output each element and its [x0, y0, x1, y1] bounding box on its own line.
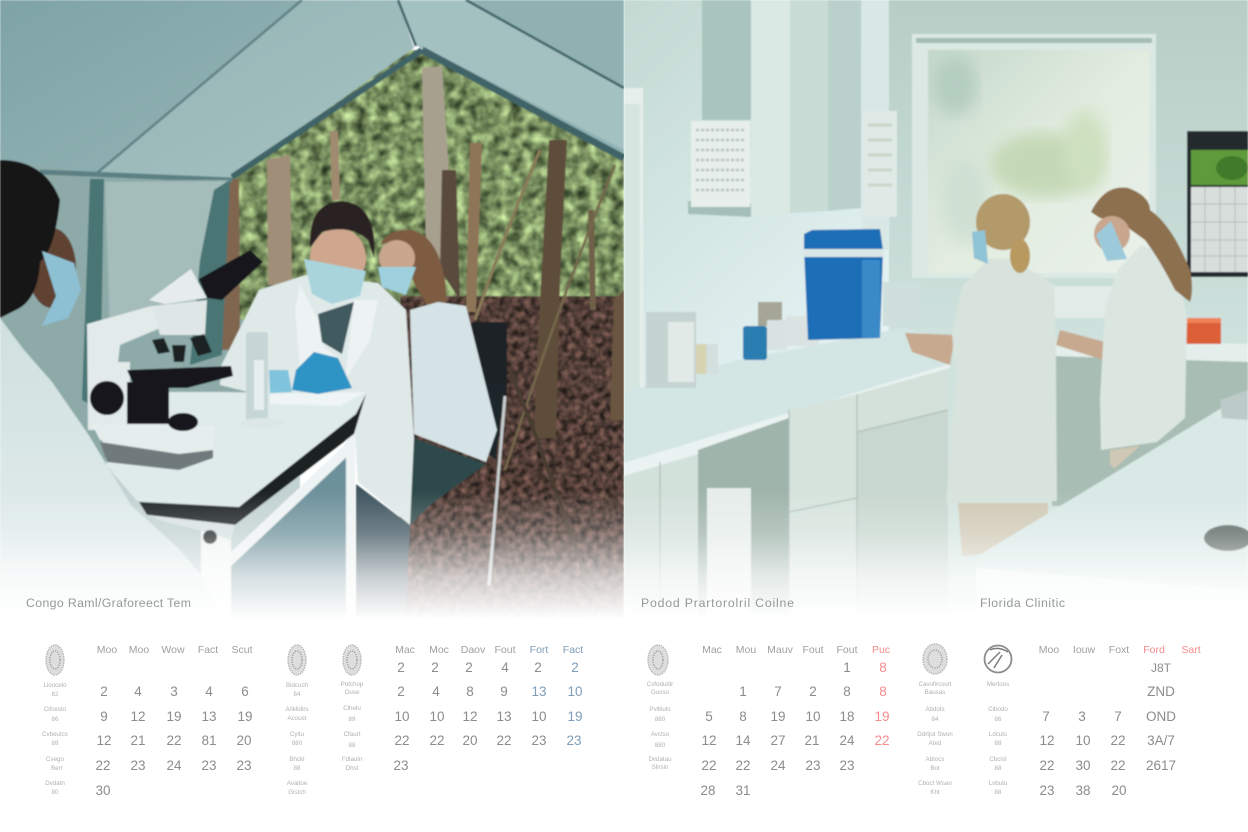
day numbers: 24 — [770, 758, 786, 773]
counter supplies — [646, 302, 819, 388]
side labels column 4 — [647, 681, 673, 771]
side labels column 6 — [987, 681, 1009, 796]
side labels column 5: Ddrtjut Swon — [917, 731, 953, 738]
day numbers: 7 — [774, 684, 782, 699]
day numbers: 4 — [134, 684, 142, 699]
day numbers: 13 — [496, 709, 512, 724]
day numbers: 2 — [100, 684, 108, 699]
day numbers: 13 — [531, 684, 547, 699]
weekday headers: Scut — [231, 644, 253, 656]
bottom white fade — [0, 490, 1248, 630]
weekday headers: Foxt — [1109, 644, 1129, 656]
day numbers: 23 — [1039, 783, 1055, 798]
day numbers: 5 — [705, 709, 713, 724]
wall cabinets — [688, 0, 861, 217]
staff member left: dress — [946, 259, 1057, 503]
weekday headers: Moo — [129, 644, 149, 656]
icon: face — [343, 645, 361, 675]
day numbers: 19 — [770, 709, 786, 724]
photo caption: podcast: Podod Prartorolril Coilne — [641, 596, 794, 610]
chair — [470, 322, 507, 585]
day numbers: 23 — [805, 758, 821, 773]
side labels column 2: A/iklidirs — [285, 706, 309, 713]
day numbers: J8T — [1151, 661, 1172, 675]
day numbers: 19 — [567, 709, 583, 724]
side labels column 5 — [917, 681, 953, 796]
side labels column 1: Berr — [51, 765, 63, 772]
side labels column 4: Slirsin — [652, 764, 669, 771]
day numbers: 2617 — [1146, 758, 1176, 773]
day numbers: 22 — [735, 758, 751, 773]
side labels column 5: Bot — [930, 765, 940, 772]
side labels column 6: Lvbutu — [989, 780, 1008, 787]
side labels column 2: Gistch — [288, 789, 306, 796]
lower cabinets — [658, 368, 950, 598]
day numbers: 38 — [1075, 783, 1091, 798]
day numbers: 3 — [170, 684, 178, 699]
door frame — [624, 88, 643, 392]
day numbers: 22 — [429, 733, 445, 748]
day numbers: 23 — [566, 733, 582, 748]
icon: face — [46, 645, 64, 675]
side labels column 1 — [42, 682, 68, 796]
wall notice left — [691, 121, 750, 207]
window — [912, 34, 1156, 278]
day numbers: 23 — [393, 758, 409, 773]
scientist back: hair and coat — [377, 229, 498, 524]
day numbers: 23 — [201, 758, 217, 773]
day numbers: 6 — [241, 684, 249, 699]
back wall below counter — [1052, 356, 1248, 506]
day numbers: 2 — [809, 684, 817, 699]
side labels column 6: 88 — [995, 740, 1002, 747]
side labels column 2: Bidcuch — [286, 682, 309, 689]
clinic wall — [648, 0, 1248, 588]
side labels column 6: Cibodo — [988, 706, 1008, 713]
side labels column 6: Cbclst — [989, 756, 1007, 763]
day numbers: 4 — [501, 660, 509, 675]
microscope — [87, 250, 263, 470]
side labels column 1: Lioncelo — [43, 682, 67, 689]
day numbers: 20 — [236, 733, 252, 748]
day numbers: 8 — [739, 709, 747, 724]
weekday headers: Mou — [736, 644, 756, 656]
weekday headers: Fout — [802, 644, 824, 656]
side labels column 5: Cavofircsurt — [918, 681, 952, 688]
weekday headers: Mauv — [767, 644, 794, 656]
orange kit box — [1186, 317, 1222, 345]
day numbers: 22 — [496, 733, 512, 748]
panel: Congo rainforest tent photo — [0, 0, 624, 636]
side labels column 3: 89 — [349, 716, 356, 723]
day numbers: 10 — [531, 709, 547, 724]
day numbers: 28 — [700, 783, 716, 798]
side labels column 2: 84 — [294, 691, 301, 698]
side labels column 6: 86 — [995, 716, 1002, 723]
day numbers: 22 — [701, 758, 717, 773]
side labels column 3: Cfaurt — [344, 731, 361, 738]
side labels column 1: 80 — [52, 789, 59, 796]
day numbers: 1 — [843, 660, 851, 675]
day numbers: 8 — [466, 684, 474, 699]
day numbers: 2 — [397, 660, 405, 675]
day numbers: 18 — [839, 709, 855, 724]
weekday headers: Moc — [429, 644, 449, 656]
icon: face — [923, 644, 947, 674]
weekday headers: Fact — [563, 644, 583, 656]
day numbers: 10 — [429, 709, 445, 724]
side labels column 3: Dhst — [346, 765, 359, 772]
glassware on counter — [883, 282, 1113, 326]
scientist left: coat — [0, 318, 200, 580]
side labels column 5: Abtocs — [926, 756, 944, 763]
weekday headers: Ford — [1143, 644, 1165, 656]
day numbers: 12 — [701, 733, 717, 748]
weekday headers: Mac — [702, 644, 722, 656]
tent roof right panel — [398, 0, 624, 157]
side labels column 6: Mertoos — [987, 681, 1009, 688]
side labels column 4: Gusso — [651, 689, 669, 696]
side labels column 6: Ldcuts — [989, 731, 1007, 738]
side labels column 5: Ated — [929, 740, 942, 747]
tent poles — [82, 179, 230, 410]
main counter — [624, 328, 950, 476]
side labels column 1: Cifcesto — [44, 706, 67, 713]
day numbers — [95, 684, 253, 798]
day numbers: 23 — [531, 733, 547, 748]
day numbers: 30 — [95, 783, 111, 798]
side labels column 6: 88 — [995, 789, 1002, 796]
blue cooler box — [803, 229, 884, 340]
day numbers: 10 — [1075, 733, 1091, 748]
day numbers: 81 — [201, 733, 217, 748]
day numbers: 2 — [431, 660, 439, 675]
side labels column 3 — [341, 681, 364, 772]
weekday headers: Fout — [494, 644, 516, 656]
day numbers: 22 — [166, 733, 182, 748]
day numbers: 1 — [739, 684, 747, 699]
side labels column 1: 86 — [52, 716, 59, 723]
side labels column 1: Dvdatn — [45, 780, 65, 787]
day numbers: ZND — [1147, 684, 1175, 699]
wall calendar — [1187, 131, 1248, 277]
side labels column 5: Cboct Wsan — [918, 780, 952, 787]
side labels column 1: 88 — [52, 740, 59, 747]
wall notice right — [868, 110, 898, 218]
side labels column 3: 88 — [349, 742, 356, 749]
day numbers: 22 — [1110, 758, 1126, 773]
side labels column 2 — [285, 682, 309, 796]
weekday headers: Fout — [836, 644, 858, 656]
day numbers: 12 — [462, 709, 478, 724]
weekday headers — [97, 644, 253, 656]
leaf litter forest floor — [400, 296, 624, 636]
calendar block 4 — [917, 644, 1201, 798]
glove — [269, 352, 352, 394]
day numbers: 3A/7 — [1147, 733, 1175, 748]
day numbers: 19 — [874, 709, 890, 724]
tent roof left panel — [0, 0, 300, 122]
weekday headers: Daov — [461, 644, 486, 656]
weekday headers: Moo — [1039, 644, 1059, 656]
side labels column 5: Bausas — [925, 689, 945, 696]
day numbers: 22 — [95, 758, 111, 773]
day numbers: 2 — [571, 660, 579, 675]
day numbers — [700, 660, 890, 798]
day numbers: 14 — [735, 733, 751, 748]
side labels column 3: Fdlauln — [342, 756, 363, 763]
day numbers: 21 — [804, 733, 820, 748]
panel: Florida clinic photo — [624, 0, 1248, 640]
day numbers: 31 — [735, 783, 751, 798]
tent seams — [40, 0, 624, 180]
day numbers: 3 — [1078, 709, 1086, 724]
staff member right: arm — [1056, 320, 1128, 362]
icon: face — [288, 645, 306, 675]
icon: face — [648, 645, 668, 675]
back counter — [1052, 340, 1248, 362]
day numbers: 4 — [432, 684, 440, 699]
side labels column 2: Acoust — [288, 715, 307, 722]
weekday headers: Fort — [530, 644, 548, 656]
weekday headers: Fact — [198, 644, 218, 656]
side labels column 5: Kht — [930, 789, 940, 796]
day numbers: 23 — [130, 758, 146, 773]
lab table — [100, 392, 366, 630]
scientist left: head and hair — [0, 160, 81, 326]
day numbers: 8 — [879, 684, 887, 699]
side labels column 2: Avaitoe — [287, 780, 308, 787]
weekday headers — [1039, 644, 1201, 656]
day numbers: 24 — [839, 733, 855, 748]
day numbers: 2 — [534, 660, 542, 675]
side labels column 1: Cvbeutcs — [42, 731, 68, 738]
side labels column 5: 84 — [932, 716, 939, 723]
side labels column 4: 880 — [655, 742, 666, 749]
day numbers: 27 — [770, 733, 786, 748]
calendar block 1 — [42, 644, 253, 798]
staff member left: arms, legs — [905, 333, 1048, 556]
side labels column 1: 82 — [52, 691, 59, 698]
day numbers: 19 — [166, 709, 182, 724]
staff member left: head — [972, 194, 1030, 273]
weekday headers: Puc — [872, 644, 890, 656]
side labels column 4: Dvdatau — [648, 756, 672, 763]
day numbers: 2 — [465, 660, 473, 675]
side labels column 2: 88 — [294, 765, 301, 772]
day numbers: 23 — [839, 758, 855, 773]
side labels column 3: Potchop — [341, 681, 364, 688]
day numbers: 2 — [397, 684, 405, 699]
day numbers: 7 — [1042, 709, 1050, 724]
weekday headers — [395, 644, 583, 656]
day numbers: OND — [1146, 709, 1176, 724]
day numbers: 9 — [100, 709, 108, 724]
calendar block 2 — [285, 644, 583, 796]
foreground island counter — [976, 390, 1248, 640]
calendar block 3 — [647, 644, 890, 798]
tent roof centre panel — [97, 0, 414, 179]
side labels column 1: Cvego — [46, 756, 64, 763]
day numbers: 12 — [130, 709, 146, 724]
sample bottle — [246, 332, 268, 420]
day numbers: 7 — [1114, 709, 1122, 724]
day numbers: 23 — [236, 758, 252, 773]
weekday headers: Sart — [1181, 644, 1201, 656]
staff member right: dress — [1100, 245, 1187, 450]
day numbers: 22 — [1110, 733, 1126, 748]
side labels column 5: Abdots — [925, 706, 945, 713]
weekday headers — [702, 644, 890, 656]
side labels column 2: 880 — [292, 740, 303, 747]
weekday headers: Wow — [161, 644, 185, 656]
tree trunks — [222, 66, 624, 590]
day numbers: 8 — [879, 660, 887, 675]
day numbers: 22 — [394, 733, 410, 748]
day numbers: 30 — [1075, 758, 1091, 773]
tent back wall — [180, 179, 230, 184]
staff member right: head and ponytail — [1091, 188, 1192, 302]
day numbers: 22 — [874, 733, 890, 748]
side labels column 6: 88 — [995, 765, 1002, 772]
side labels column 4: Avctso — [651, 731, 670, 738]
day numbers: 24 — [166, 758, 182, 773]
day numbers: 12 — [1039, 733, 1055, 748]
day numbers: 10 — [567, 684, 583, 699]
day numbers — [393, 660, 583, 773]
day numbers: 20 — [1111, 783, 1127, 798]
tent interior base — [0, 162, 301, 574]
day numbers: 8 — [843, 684, 851, 699]
day numbers: 9 — [500, 684, 508, 699]
side labels column 4: 880 — [655, 716, 666, 723]
day numbers: 10 — [394, 709, 410, 724]
scientist centre: lab coat — [220, 275, 414, 625]
day numbers: 20 — [462, 733, 478, 748]
forest foliage background — [210, 50, 624, 320]
day numbers — [1039, 661, 1176, 798]
day numbers: 21 — [130, 733, 146, 748]
day numbers: 4 — [205, 684, 213, 699]
weekday headers: Moo — [97, 644, 117, 656]
side labels column 3: Ouse — [345, 689, 360, 696]
day numbers: 10 — [805, 709, 821, 724]
side labels column 2: Cyltu — [290, 731, 305, 738]
day numbers: 13 — [201, 709, 217, 724]
icon: tool badge — [984, 646, 1012, 672]
photo caption: Florida: Florida Clinitic — [980, 596, 1065, 610]
weekday headers: Iouw — [1073, 644, 1096, 656]
day numbers: 22 — [1039, 758, 1055, 773]
day numbers: 12 — [96, 733, 112, 748]
scientist centre: head and mask — [304, 201, 374, 304]
side labels column 2: Bhckl — [289, 756, 305, 763]
photo caption: Congo team: Congo Raml/Graforeect Tem — [26, 596, 191, 610]
side labels column 4: Cvfoduldr — [647, 681, 673, 688]
side labels column 3: Clhelu — [343, 705, 361, 712]
side labels column 4: Pvlltiuts — [649, 706, 671, 713]
weekday headers: Mac — [395, 644, 415, 656]
day numbers: 19 — [237, 709, 253, 724]
